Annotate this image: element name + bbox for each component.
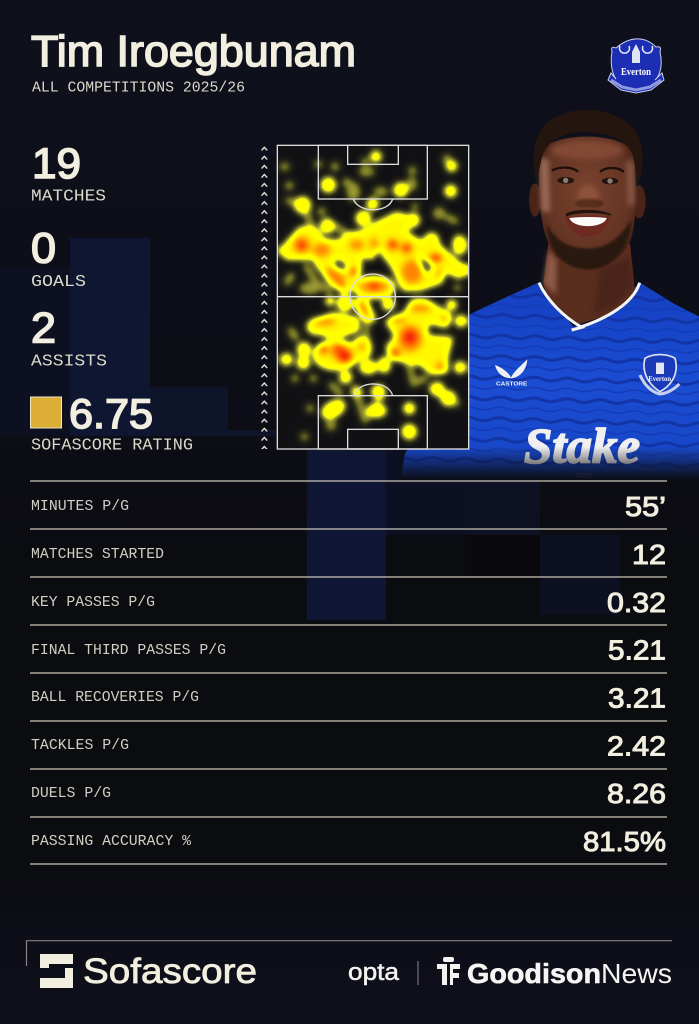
heat blobs (277, 145, 469, 449)
head (539, 137, 636, 269)
stat: goals (31, 224, 86, 291)
stat: sofascore rating: 6.75 (69, 390, 153, 437)
stat: assists (31, 304, 107, 370)
shirt crest (640, 355, 679, 394)
row: passing accuracy: PASSING ACCURACY % (31, 834, 191, 850)
footer rule (26, 941, 672, 966)
row: final third passes: FINAL THIRD PASSES P/G (31, 643, 226, 659)
row: passing accuracy: 81.5% (583, 826, 666, 857)
row: matches started: 12 (632, 539, 666, 570)
row: ball recoveries: 3.21 (608, 682, 666, 714)
row: duels: DUELS P/G (31, 786, 111, 802)
shirt crest: Everton (648, 374, 671, 383)
kit maker logo (495, 359, 528, 388)
hair (534, 110, 643, 183)
icon: Everton crest (608, 39, 664, 93)
smile (565, 215, 611, 237)
eyes (557, 177, 618, 184)
stat: matches: MATCHES (31, 186, 106, 206)
row: key passes (31, 587, 666, 618)
row: matches started (31, 539, 666, 570)
row: tackles (31, 730, 666, 762)
row: tackles: 2.42 (607, 730, 666, 762)
shirt sponsor: Stake (524, 418, 640, 474)
logo: Goodison News: News (601, 958, 672, 989)
stats table (30, 481, 667, 864)
ears (529, 183, 646, 218)
stat: matches (31, 140, 106, 206)
row: key passes: 0.32 (607, 587, 666, 618)
collar (539, 283, 640, 330)
row: duels (31, 778, 666, 809)
icon: Everton crest: Everton (621, 67, 651, 78)
row: passing accuracy (31, 826, 666, 857)
row: duels: 8.26 (607, 778, 666, 809)
stat: sofascore rating (30, 390, 193, 454)
row: key passes: KEY PASSES P/G (31, 595, 155, 611)
row: minutes per game: MINUTES P/G (31, 499, 129, 515)
nose (575, 199, 603, 208)
row: minutes per game: 55’ (625, 491, 666, 522)
stat: matches: 19 (32, 140, 81, 188)
row: minutes per game (31, 491, 666, 522)
bottom fade (400, 447, 699, 480)
stat: goals: GOALS (31, 272, 86, 291)
row: final third passes: 5.21 (608, 634, 666, 666)
logo: opta: opta (348, 959, 400, 986)
stat: goals: 0 (31, 224, 56, 272)
stat: assists: 2 (31, 304, 56, 352)
stat: sofascore rating: SOFASCORE RATING (31, 436, 193, 454)
sponsor domain: .com (573, 469, 592, 479)
row: tackles: TACKLES P/G (31, 738, 129, 754)
heatmap pitch (277, 145, 469, 449)
neck (543, 243, 635, 325)
row: ball recoveries: BALL RECOVERIES P/G (31, 690, 199, 706)
beard (547, 220, 631, 269)
logo: Goodison News: Goodison (467, 958, 601, 989)
face highlights (539, 141, 635, 212)
stat: assists: ASSISTS (31, 352, 107, 370)
subtitle: ALL COMPETITIONS 2025/26 (32, 80, 245, 96)
pitch lines (277, 145, 469, 449)
divider (418, 961, 419, 985)
eyebrows (552, 168, 624, 172)
row: matches started: MATCHES STARTED (31, 547, 164, 563)
title: Tim Iroegbunam (31, 27, 356, 76)
logo: Goodison News (437, 957, 672, 989)
row: ball recoveries (31, 682, 666, 714)
direction of play arrows (261, 145, 268, 449)
jersey (400, 283, 699, 480)
row: final third passes (31, 634, 666, 666)
logo: Sofascore: Sofascore (83, 952, 257, 991)
kit maker logo: CASTORE (496, 382, 528, 388)
player photo (400, 110, 699, 480)
